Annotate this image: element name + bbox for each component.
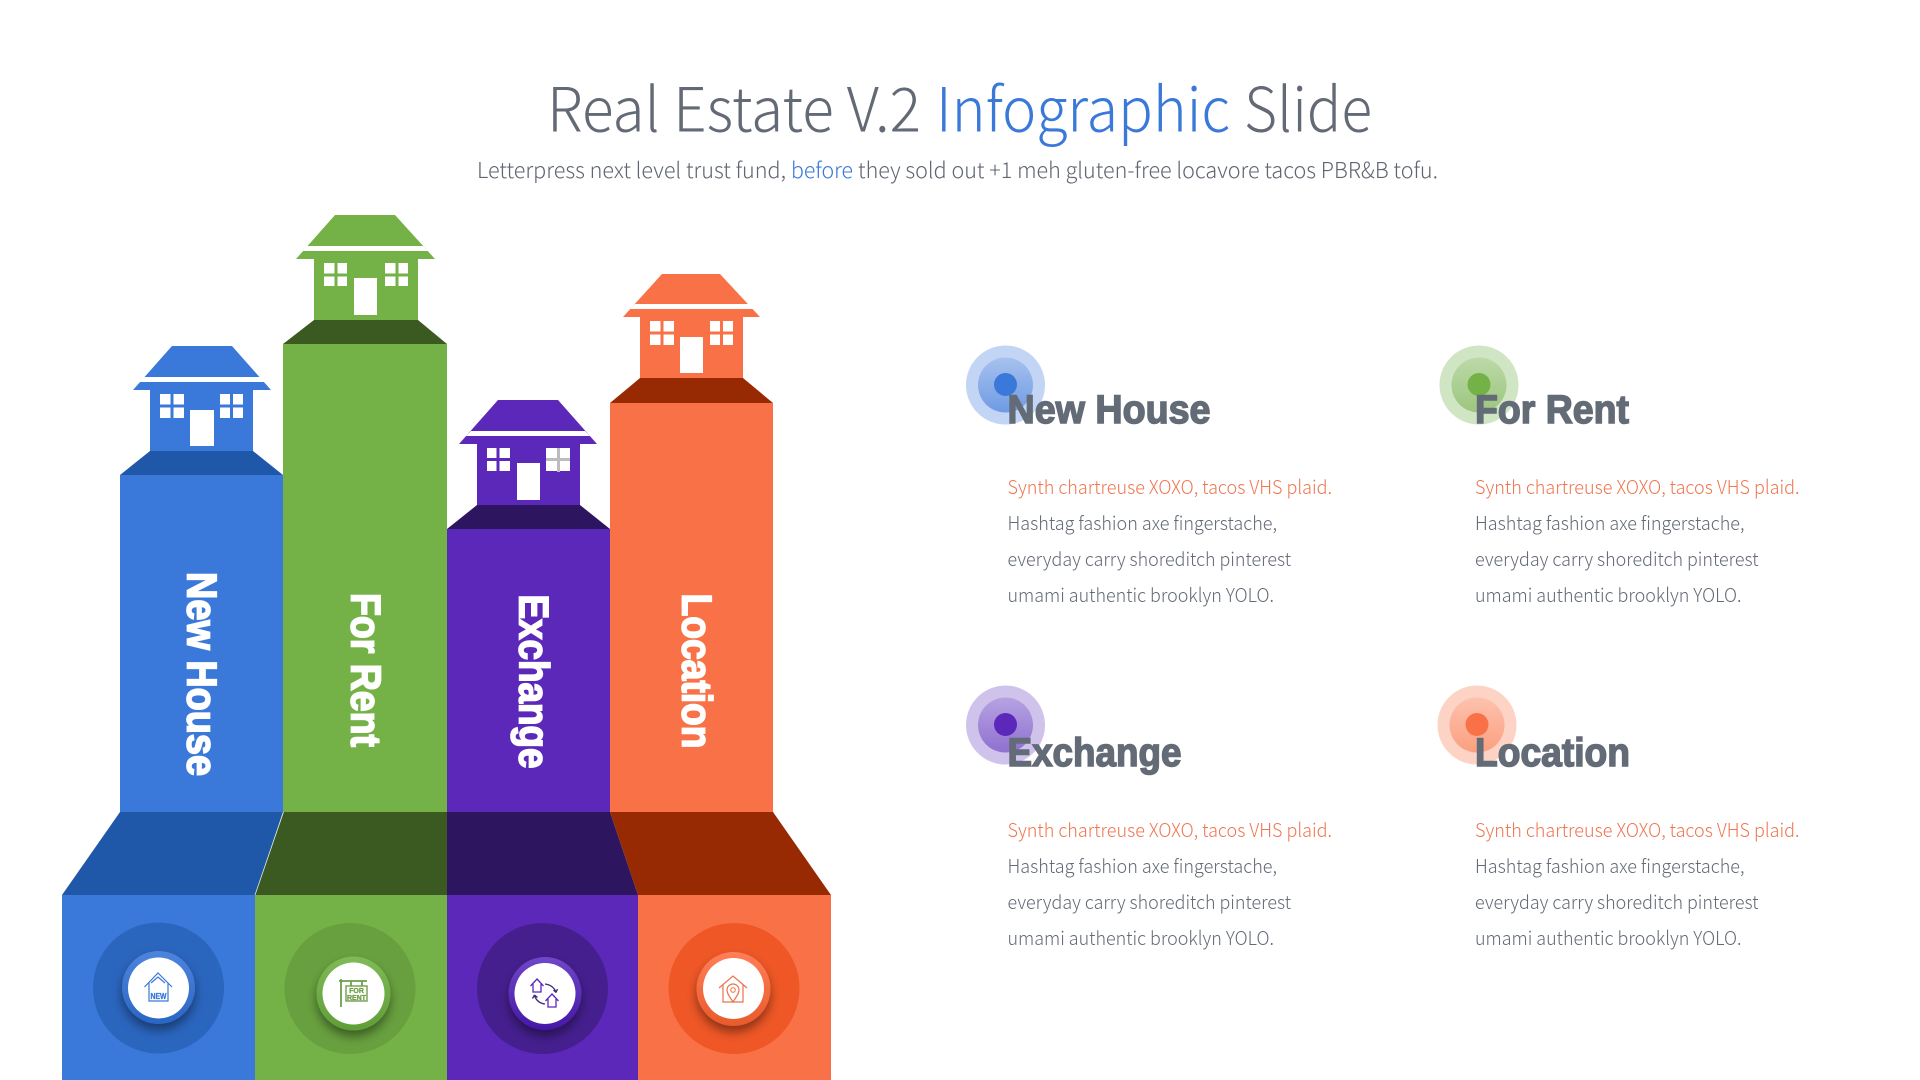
floor perspective: for rent — [255, 812, 447, 895]
panel: exchange column — [447, 400, 638, 1080]
front block: location — [638, 895, 831, 1080]
front block: exchange — [447, 895, 638, 1080]
panel: for rent column — [255, 215, 448, 1080]
heading: location: Location — [1475, 731, 1630, 775]
body text: for rent: umami authentic brooklyn YOLO. — [1475, 581, 1742, 608]
heading: new house: New House — [1008, 388, 1210, 432]
panel: location description — [1438, 686, 1800, 951]
body text: new house: Hashtag fashion axe fingerstache, — [1008, 509, 1277, 536]
marker: exchange — [966, 686, 1045, 764]
body text: new house — [1008, 473, 1332, 608]
title: Real Estate V.2 — [547, 60, 921, 150]
body text: location: Synth chartreuse XOXO, tacos VHS plaid. — [1475, 816, 1800, 843]
body text: location: Hashtag fashion axe fingerstache, — [1475, 852, 1744, 879]
body text: exchange — [1008, 816, 1332, 951]
heading: for rent: For Rent — [1475, 388, 1629, 432]
column bar: for rent — [283, 344, 447, 812]
gap line between blue and green floors — [255, 812, 284, 895]
icon: green house — [296, 215, 435, 320]
panel: location column — [610, 274, 831, 1080]
marker: location — [1438, 686, 1516, 764]
body text: exchange: umami authentic brooklyn YOLO. — [1008, 924, 1274, 951]
floor perspective: exchange — [447, 812, 638, 895]
top ledge: location — [610, 378, 773, 403]
body text: exchange: everyday carry shoreditch pinterest — [1008, 888, 1291, 915]
body text: new house: Synth chartreuse XOXO, tacos VHS plaid. — [1008, 473, 1332, 500]
icon: orange house — [623, 274, 760, 378]
marker: for rent — [1440, 346, 1518, 424]
column bar: exchange — [447, 529, 610, 812]
panel: for rent description — [1440, 346, 1800, 608]
body text: for rent: Synth chartreuse XOXO, tacos VHS plaid. — [1475, 473, 1800, 500]
icon badge: for rent: RENT — [347, 995, 367, 1002]
heading: exchange: Exchange — [1008, 731, 1182, 775]
top ledge: exchange — [447, 505, 610, 529]
icon: purple house — [459, 400, 597, 505]
body text: for rent: everyday carry shoreditch pinterest — [1475, 545, 1759, 572]
icon badge: for rent — [284, 923, 416, 1054]
subtitle: they sold out +1 meh gluten-free locavore tacos PBR&B tofu. — [858, 153, 1438, 185]
marker: new house — [966, 346, 1045, 424]
column label: for rent: For Rent — [342, 593, 390, 747]
subtitle: before — [791, 153, 853, 185]
title — [547, 60, 1372, 150]
title: Slide — [1244, 60, 1372, 150]
body text: location: umami authentic brooklyn YOLO. — [1475, 924, 1742, 951]
floor perspective: new house — [62, 812, 283, 895]
panel: new house column — [62, 346, 284, 1080]
body text: for rent — [1475, 473, 1800, 608]
front block: for rent — [255, 895, 448, 1080]
body text: new house: everyday carry shoreditch pinterest — [1008, 545, 1291, 572]
column label: exchange: Exchange — [510, 594, 558, 768]
front block: new house — [62, 895, 255, 1080]
column bar: location — [610, 403, 773, 812]
icon badge: location — [668, 923, 800, 1054]
top ledge: new house — [120, 451, 283, 475]
subtitle: Letterpress next level trust fund, — [477, 153, 786, 185]
icon badge: exchange — [477, 923, 608, 1054]
icon badge: new — [93, 922, 224, 1054]
icon: blue house — [133, 346, 271, 451]
icon badge: for rent: FOR — [349, 988, 364, 995]
icon badge: new: NEW — [150, 992, 167, 1001]
title: Infographic — [936, 60, 1230, 150]
body text: new house: umami authentic brooklyn YOLO. — [1008, 581, 1274, 608]
body text: location: everyday carry shoreditch pinterest — [1475, 888, 1759, 915]
top ledge: for rent — [283, 320, 447, 344]
panel: exchange description — [966, 686, 1332, 951]
floor perspective: location — [610, 812, 831, 895]
panel: new house description — [966, 346, 1332, 608]
body text: exchange: Synth chartreuse XOXO, tacos VHS plaid. — [1008, 816, 1332, 843]
body text: exchange: Hashtag fashion axe fingerstache, — [1008, 852, 1277, 879]
column label: new house: New House — [178, 572, 226, 776]
column bar: new house — [120, 475, 284, 812]
body text: for rent: Hashtag fashion axe fingerstache, — [1475, 509, 1744, 536]
column label: location: Location — [674, 594, 720, 748]
subtitle — [477, 153, 1438, 185]
body text: location — [1475, 816, 1800, 951]
